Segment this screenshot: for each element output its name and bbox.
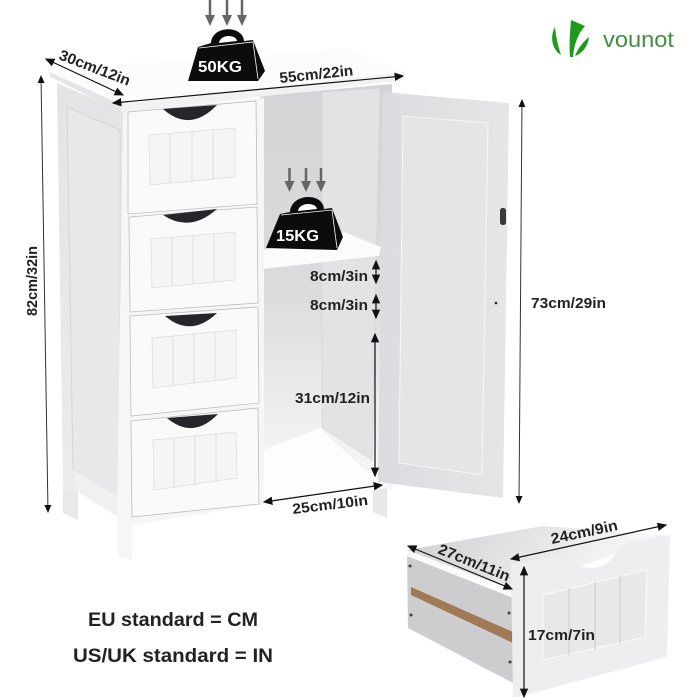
dimension: drawer height 17cm: 17cm/7in: [528, 627, 595, 644]
arrows: [290, 168, 321, 182]
dimension: drawer width 24cm: [511, 517, 666, 559]
dimension: drawer depth 27cm: [408, 541, 512, 589]
dimension: shelf gap 8cm upper: [310, 261, 376, 285]
dimension: 31cm: 31cm/12in: [295, 391, 370, 407]
cabinet interior: [260, 84, 392, 505]
drawer detail: [407, 526, 670, 697]
dimension: 25cm: [264, 485, 382, 518]
dimension: drawer height 17cm: [524, 567, 595, 697]
door: [378, 92, 509, 498]
drawer 3: [130, 307, 259, 416]
drawer side: [407, 550, 513, 683]
drawer rail: [411, 587, 513, 643]
dimension: drawer depth 27cm: 27cm/11in: [436, 541, 512, 585]
note: EU standard: EU standard = CM: [88, 610, 258, 631]
drawer 2: [129, 207, 258, 312]
logo: vounot: vounot: [603, 27, 674, 52]
weight: 50KG: [188, 0, 265, 81]
weight icon: [188, 29, 265, 81]
drawer 1: [128, 101, 257, 214]
dimension: door height 73cm: 73cm/29in: [531, 295, 606, 312]
drawer front: [511, 535, 670, 697]
shelf: [263, 232, 381, 269]
dimension: drawer width 24cm: 24cm/9in: [549, 517, 619, 548]
arrows: [210, 0, 242, 16]
drawer interior: [407, 526, 670, 590]
dimension: width 55cm: [113, 62, 403, 103]
dimension: 25cm: 25cm/10in: [292, 493, 369, 518]
dimension: door height 73cm: [519, 100, 606, 503]
logo: vounot: [552, 20, 674, 57]
dimension: width 55cm: 55cm/22in: [279, 62, 354, 87]
dimension: depth 30cm: 30cm/12in: [57, 47, 133, 90]
dimension: shelf gap 8cm lower: [310, 295, 376, 318]
weight: 15KG: 15KG: [276, 228, 319, 245]
screws: [410, 566, 510, 662]
note: US/UK standard: US/UK standard = IN: [73, 646, 273, 667]
dimension: shelf gap 8cm upper: 8cm/3in: [310, 269, 368, 285]
weight icon: [266, 197, 343, 250]
right leg: [373, 488, 387, 518]
cabinet illustration: [49, 48, 509, 560]
cabinet front frame: [117, 98, 264, 560]
weight: 50KG: 50KG: [198, 59, 242, 76]
dimension: shelf gap 8cm lower: 8cm/3in: [310, 298, 368, 314]
dimension: height 82cm: [24, 76, 48, 512]
cabinet left side panel: [57, 83, 124, 520]
drawer 4: [131, 408, 259, 517]
logo leaf icon: [552, 20, 589, 57]
dimension: height 82cm: 82cm/32in: [24, 246, 41, 316]
weight: 15KG: [266, 168, 343, 250]
cabinet top: [49, 48, 405, 113]
